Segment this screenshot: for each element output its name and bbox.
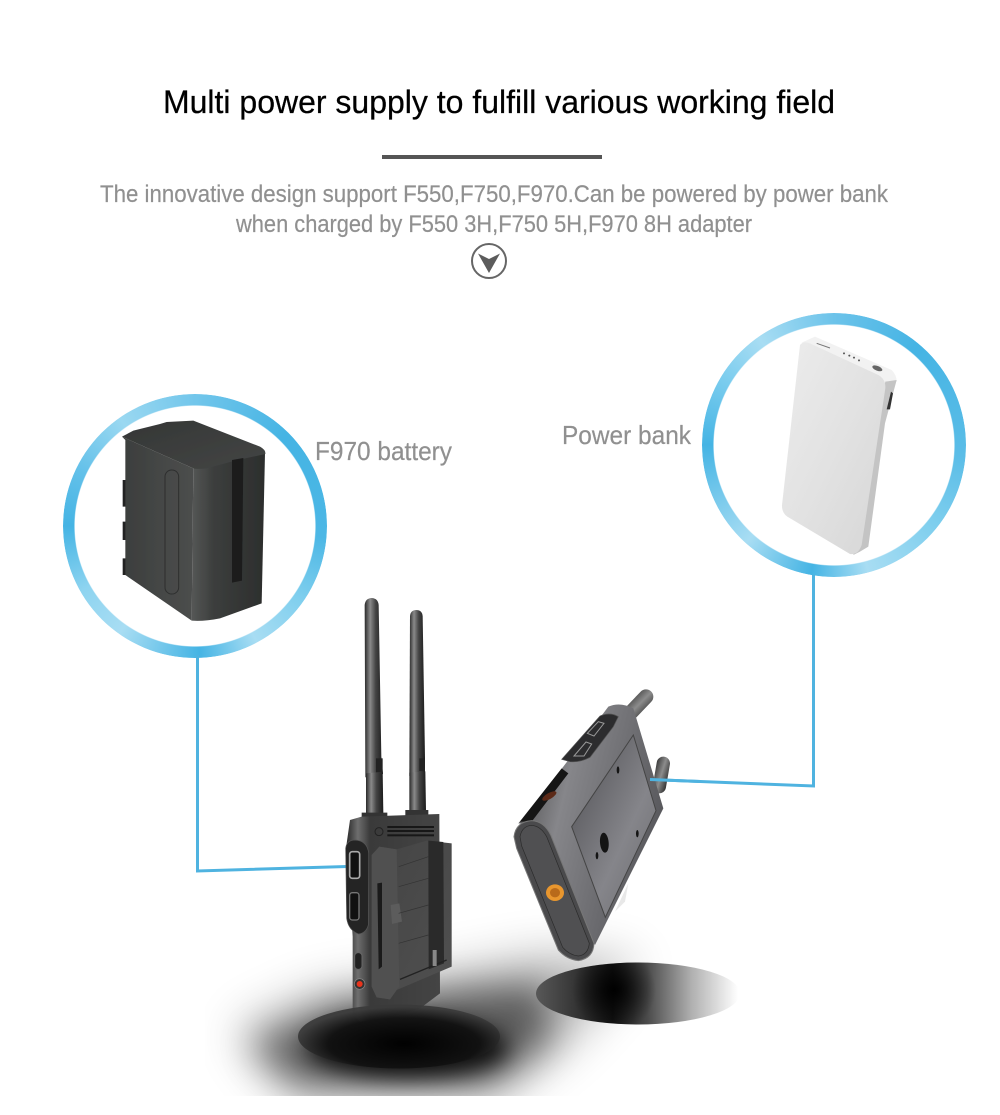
power bank face	[782, 342, 885, 554]
power bank indicators and ports	[817, 343, 893, 409]
label: Power bank: Power bank	[562, 420, 692, 450]
connector line overlay on tilted device	[650, 780, 700, 782]
icon: F970 battery	[122, 421, 265, 621]
subtitle text block	[100, 181, 889, 238]
mounting pins	[632, 697, 663, 787]
end cap with brass screw	[514, 821, 594, 961]
icon: power bank	[782, 337, 897, 555]
soft floor shadow: left	[235, 955, 640, 1100]
vent grille	[375, 826, 434, 836]
floor shadow ellipse: left	[298, 1004, 500, 1068]
subtitle text block: The innovative design support F550,F750,F970.Can be powered by power bank	[100, 181, 889, 208]
antennas	[362, 598, 428, 818]
ring: F970 battery circle	[62, 394, 326, 658]
port cover	[562, 714, 618, 762]
title divider bar	[382, 155, 602, 159]
device body	[347, 814, 440, 1022]
port cover with HDMI ports	[346, 840, 369, 934]
connector line: power bank to device	[650, 575, 814, 786]
label: F970 battery: F970 battery	[315, 436, 452, 466]
ring: power bank circle	[702, 313, 966, 577]
infographic canvas	[100, 89, 897, 1096]
connector line: battery to device	[198, 655, 364, 871]
dark edge with ports	[520, 768, 568, 822]
battery mounting plate	[372, 841, 452, 999]
power bank side edge	[853, 380, 897, 555]
floor shadow ellipse: right	[536, 962, 740, 1024]
side jack and red LED	[354, 953, 365, 989]
device: receiver tilted showing back plate	[514, 697, 663, 961]
back plate with screw holes	[572, 735, 656, 917]
device: receiver standing with antennas	[346, 598, 452, 1022]
title: Multi power supply to fulfill various working field	[163, 84, 835, 120]
power bank top edge	[802, 337, 897, 385]
icon: down arrow in circle	[472, 244, 506, 278]
subtitle text block: when charged by F550 3H,F750 5H,F970 8H adapter	[235, 211, 752, 238]
tilted body	[518, 705, 663, 945]
